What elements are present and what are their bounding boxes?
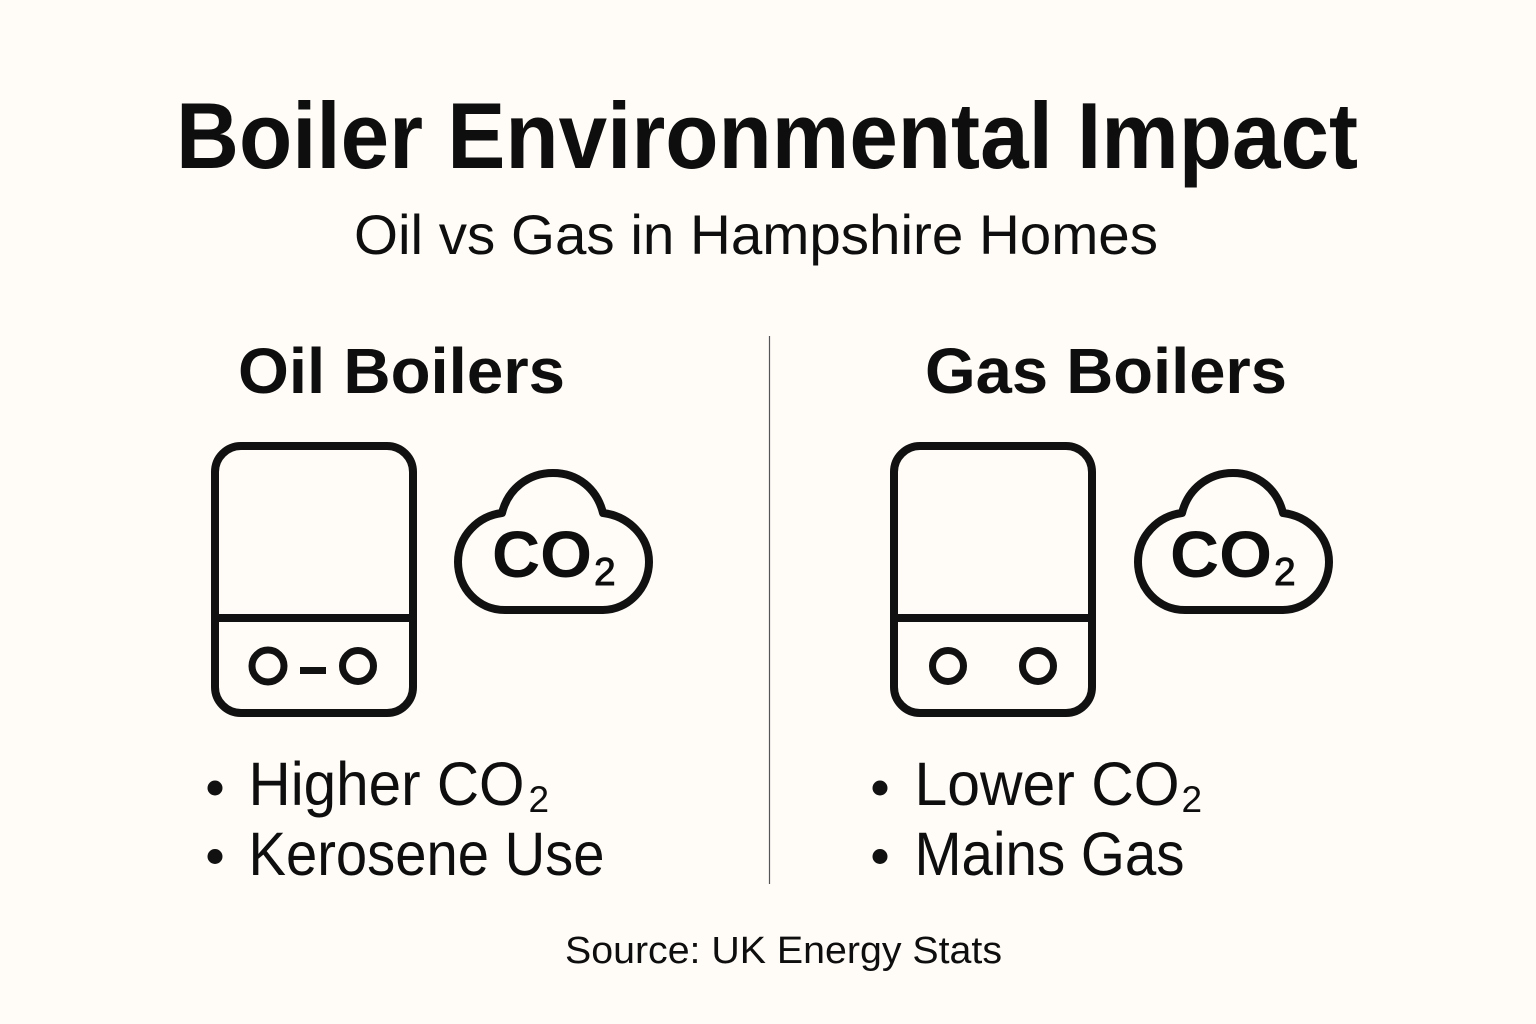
bullet list: oil boilers: Higher CO [248,750,524,818]
panel: gas boilers [872,335,1329,888]
panel: oil boilers [208,335,649,888]
icon: CO2 cloud [1138,473,1329,610]
source note: Source: UK Energy Stats [565,930,1002,972]
icon: oil boiler [215,446,413,713]
bullet list: gas boilers: Lower CO [914,750,1180,818]
bullet list: oil boilers: 2 [528,779,549,820]
icon: gas boiler [894,446,1092,713]
heading: oil boilers: Oil Boilers [238,335,565,407]
icon: CO2 cloud: 2 [594,551,616,594]
bullet list: gas boilers: 2 [1182,779,1202,820]
title: Boiler Environmental Impact [176,83,1358,188]
icon: CO2 cloud: CO [1170,517,1272,591]
icon: CO2 cloud: 2 [1274,551,1296,594]
subtitle: Oil vs Gas in Hampshire Homes [354,203,1158,266]
icon: CO2 cloud: CO [492,517,592,591]
bullet list: gas boilers: Mains Gas [914,820,1184,888]
heading: gas boilers: Gas Boilers [925,335,1287,407]
bullet list: oil boilers [208,750,604,888]
bullet list: oil boilers: Kerosene Use [248,820,604,888]
icon: CO2 cloud [458,473,649,610]
bullet list: gas boilers [872,750,1202,888]
